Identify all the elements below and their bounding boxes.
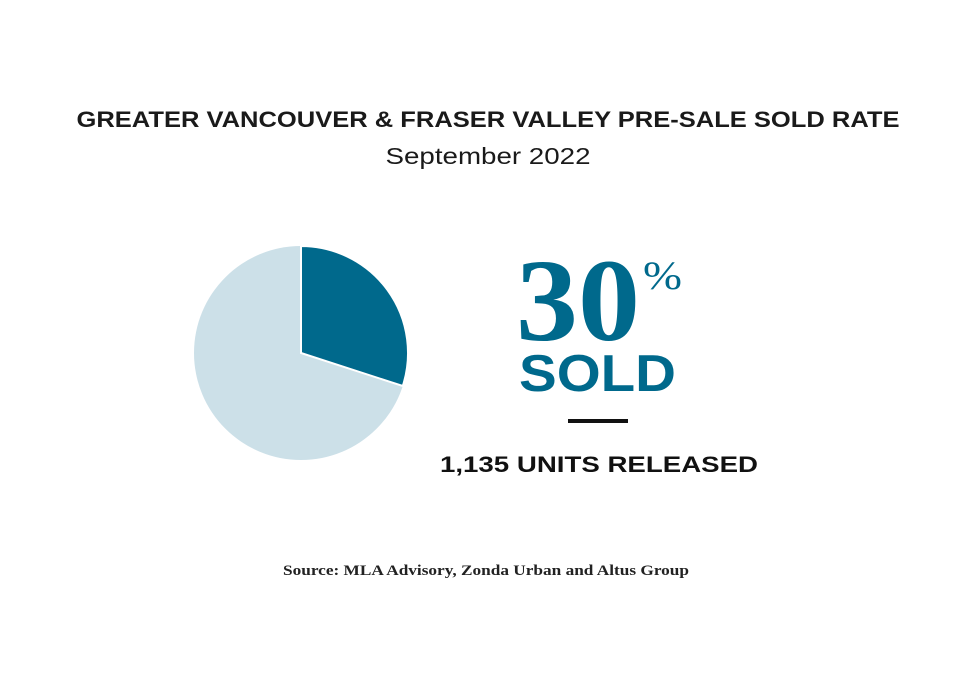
pie chart [194, 246, 408, 460]
units released: 1,135 UNITS RELEASED [440, 452, 758, 477]
stat label: SOLD: SOLD [519, 345, 676, 403]
stat: 30%: % [643, 253, 682, 298]
stat: 30%: 30 [516, 235, 640, 366]
source: Source: MLA Advisory, Zonda Urban and Altus Group [283, 563, 689, 579]
subtitle: September 2022 [386, 143, 590, 169]
title: GREATER VANCOUVER & FRASER VALLEY PRE-SALE SOLD RATE [76, 107, 900, 132]
